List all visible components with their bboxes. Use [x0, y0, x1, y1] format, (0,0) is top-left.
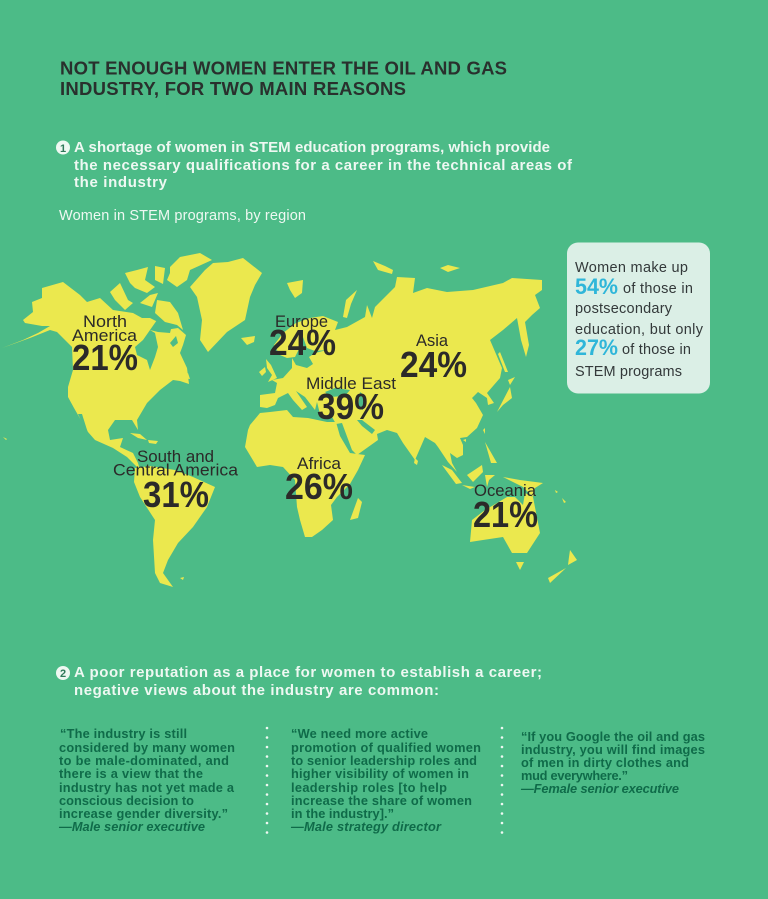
- inland seas: [78, 320, 375, 434]
- label: South and Central America: [113, 448, 239, 515]
- quote 3: [520, 729, 705, 796]
- quote 1: to be male-dominated, and: [59, 753, 229, 768]
- label: North America: 21%: [72, 337, 138, 378]
- quote 2: increase the share of women: [291, 793, 472, 808]
- reason 2 text: 2: [60, 668, 66, 680]
- quote 3: mud everywhere.”: [521, 768, 628, 783]
- label: North America: America: [72, 327, 138, 345]
- callout: women in education: 27%: [575, 335, 618, 360]
- label: Middle East: [306, 375, 396, 427]
- reason 1 text: A shortage of women in STEM education programs, which provide: [74, 139, 550, 156]
- quote 2: to senior leadership roles and: [291, 753, 477, 768]
- callout: women in education: STEM programs: [575, 364, 682, 380]
- label: Oceania: 21%: [473, 494, 538, 535]
- quote 1: increase gender diversity.”: [59, 806, 228, 821]
- quote 3: industry, you will find images: [521, 742, 705, 757]
- title: INDUSTRY, FOR TWO MAIN REASONS: [60, 78, 406, 99]
- quote 2: leadership roles [to help: [291, 780, 447, 795]
- title: [60, 58, 507, 99]
- quote 2: higher visibility of women in: [291, 766, 469, 781]
- label: Africa: 26%: [285, 466, 353, 507]
- label: North America: [72, 313, 138, 378]
- reason 2 text: negative views about the industry are common:: [74, 682, 439, 699]
- reason 1 text: [56, 139, 573, 191]
- quote 1: considered by many women: [59, 740, 235, 755]
- quote 1: industry has not yet made a: [59, 780, 235, 795]
- callout: women in education: of those in: [622, 342, 691, 358]
- reason 1 text: the industry: [74, 174, 168, 191]
- label: Asia: 24%: [400, 344, 467, 385]
- label: South and Central America: Central America: [113, 462, 239, 480]
- quote 3: “If you Google the oil and gas: [521, 729, 705, 744]
- label: Middle East: 39%: [317, 386, 384, 427]
- label: Africa: Africa: [297, 455, 342, 473]
- label: South and Central America: 31%: [143, 474, 209, 515]
- label: Europe: 24%: [269, 322, 336, 363]
- label: Asia: Asia: [416, 332, 449, 350]
- world map: [2, 253, 577, 587]
- quote 1: there is a view that the: [59, 766, 203, 781]
- quote 1: “The industry is still: [60, 726, 187, 741]
- map subtitle: Women in STEM programs, by region: [59, 208, 306, 224]
- reason 2 text: A poor reputation as a place for women to establish a career;: [74, 664, 542, 681]
- quote 1: —Male senior executive: [58, 819, 205, 834]
- title: NOT ENOUGH WOMEN ENTER THE OIL AND GAS: [60, 58, 507, 78]
- quote 2: [290, 726, 481, 834]
- quote 3: of men in dirty clothes and: [521, 755, 689, 770]
- label: Oceania: Oceania: [474, 482, 537, 500]
- callout: women in education: education, but only: [575, 322, 704, 338]
- label: Europe: Europe: [275, 313, 328, 331]
- quote 2: —Male strategy director: [290, 819, 442, 834]
- callout: women in education: [567, 242, 710, 394]
- quote 2: in the industry].”: [291, 806, 394, 821]
- reason 2 text: [56, 664, 542, 699]
- quote 1: conscious decision to: [59, 793, 194, 808]
- reason 1 text: 1: [60, 143, 66, 155]
- reason 1 text: the necessary qualifications for a career in the technical areas of: [74, 157, 573, 174]
- callout: women in education: postsecondary: [575, 301, 673, 317]
- label: South and Central America: South and: [137, 448, 214, 466]
- quote 2: promotion of qualified women: [291, 740, 481, 755]
- quote 2: “We need more active: [291, 726, 428, 741]
- label: North America: North: [83, 313, 127, 331]
- quote 3: —Female senior executive: [520, 781, 679, 796]
- callout: women in education: of those in: [623, 281, 693, 297]
- callout: women in education: 54%: [575, 274, 618, 299]
- quote 1: [58, 726, 235, 834]
- callout: women in education: Women make up: [575, 260, 688, 276]
- label: Middle East: Middle East: [306, 375, 396, 393]
